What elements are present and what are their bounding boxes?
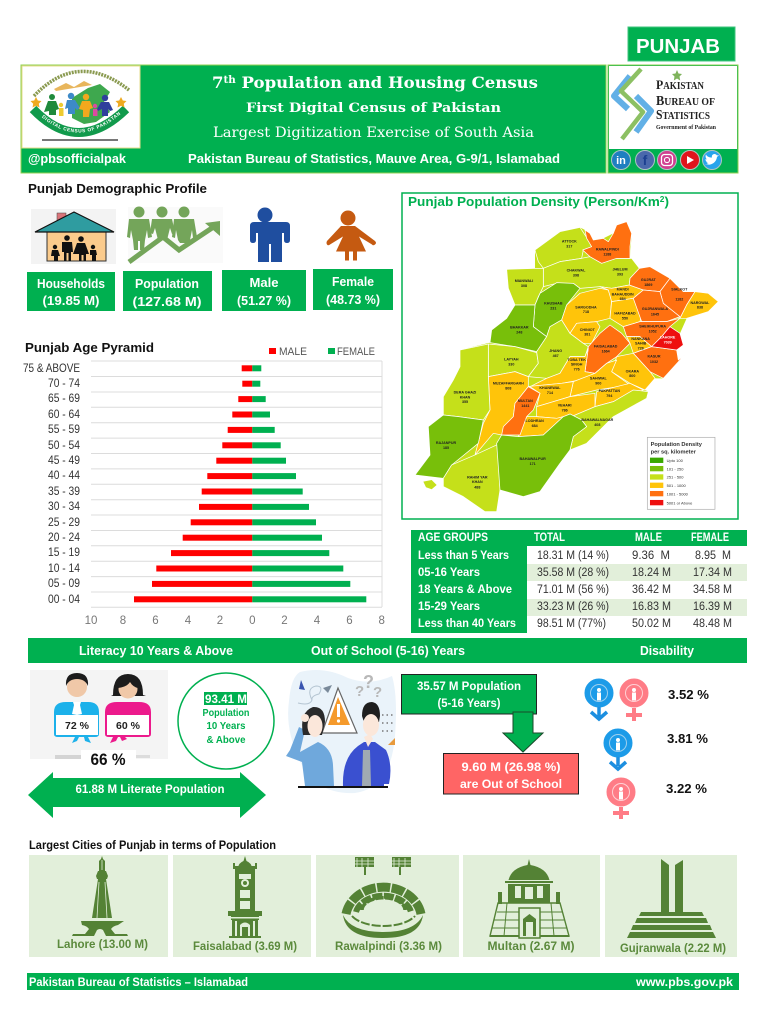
- legend: density: 101 - 250: [667, 466, 684, 471]
- table values: 50.02 M: [632, 618, 671, 630]
- map: Punjab districts: SINGH: [571, 363, 583, 367]
- legend: density: 501 - 1000: [667, 483, 686, 488]
- map: Punjab districts: 308: [521, 284, 527, 288]
- badge: PUNJAB: [628, 27, 735, 61]
- woman: 60 %: [116, 720, 141, 732]
- map: Punjab districts: 248: [516, 330, 522, 334]
- table header: [418, 532, 729, 544]
- legend: density: per sq. kilometer: [651, 449, 697, 455]
- map: Punjab districts: [415, 222, 718, 512]
- map: Punjab districts: TOBA TEK: [567, 358, 586, 362]
- city: Gujranwala: Gujranwala (2.22 M): [620, 943, 726, 955]
- heading: census title: 7: [212, 73, 223, 92]
- age labels: 00 - 04: [48, 594, 81, 606]
- icon: confused people with warning: [286, 670, 396, 793]
- city: Rawalpindi: [316, 855, 459, 957]
- heading: density title: Punjab Population Density (Person/Km: [408, 194, 649, 209]
- heading: first digital census: First Digital Census of Pakistan: [246, 101, 502, 116]
- map: Punjab districts: MANDI: [617, 288, 629, 292]
- icon: disability female: [608, 780, 634, 819]
- map: Punjab districts: FAISALABAD: [594, 345, 618, 349]
- table values: 35.58 M (28 %): [537, 567, 609, 579]
- map: Punjab districts: 794: [606, 394, 613, 398]
- city: Rawalpindi: Rawalpindi (3.36 M): [335, 941, 442, 953]
- icon: households: [31, 209, 116, 264]
- logo: digital census of Pakistan: DIGITAL CENSUS OF PAKISTAN: [42, 112, 120, 132]
- map: Punjab districts: OKARA: [626, 369, 639, 373]
- row labels: [418, 550, 516, 630]
- age labels: [23, 363, 81, 606]
- map: Punjab districts: SHEIKHUPURA: [639, 325, 666, 329]
- map: Punjab districts: BHAKKAR: [510, 325, 529, 329]
- row labels: Less than 5 Years: [418, 550, 509, 562]
- icons: social media: f: [643, 152, 648, 168]
- label: population: (127.68 M): [132, 294, 202, 309]
- map: Punjab districts: 467: [553, 354, 559, 358]
- callout: population 10 years and above: 93.41 M: [205, 694, 247, 706]
- map: Punjab districts: 355: [462, 400, 468, 404]
- table header: AGE GROUPS: [418, 532, 488, 544]
- age labels: 50 - 54: [48, 440, 81, 452]
- age labels: 75 & ABOVE: [23, 363, 80, 375]
- axis labels: 2: [281, 615, 288, 627]
- icon: confused people with warning: ?: [355, 683, 364, 700]
- icon: disability both sexes: [586, 680, 646, 721]
- logo: digital census of Pakistan: [22, 66, 140, 148]
- axis labels: [85, 615, 385, 627]
- legend: pyramid: [269, 346, 375, 358]
- table values: 34.58 M: [693, 584, 732, 596]
- legend: density: 5001 or Above: [667, 500, 693, 505]
- legend: density: [647, 437, 715, 509]
- map: Punjab districts: VEHARI: [558, 403, 572, 407]
- legend: density: Population Density: [651, 442, 703, 448]
- map: Punjab districts: RAWALPINDI: [596, 248, 619, 252]
- box: 5-16 population: 35.57 M Population: [417, 681, 521, 693]
- icon: population growth: [127, 206, 223, 263]
- map: Punjab districts: MIANWALI: [515, 279, 533, 283]
- city: Multan: Multan (2.67 M): [488, 941, 575, 953]
- map: Punjab districts: MUZAFFARGARH: [493, 382, 524, 386]
- table values: 33.23 M (26 %): [537, 601, 609, 613]
- map: Punjab districts: JHELUM: [612, 267, 628, 271]
- label: male: [222, 270, 306, 311]
- axis labels: 4: [185, 615, 192, 627]
- heading: census title: th: [224, 75, 237, 86]
- map: Punjab districts: 786: [562, 408, 568, 412]
- map: Punjab districts: 800: [629, 374, 635, 378]
- age labels: 45 - 49: [48, 455, 80, 467]
- table values: 18.24 M: [632, 567, 671, 579]
- table: age groups: [411, 530, 747, 633]
- age labels: 55 - 59: [48, 424, 80, 436]
- map: Punjab districts: 488: [474, 485, 480, 489]
- map: Punjab districts: 317: [566, 244, 572, 248]
- panel: population density: [402, 193, 738, 519]
- map: Punjab districts: 900: [595, 381, 601, 385]
- callout: population 10 years and above: Population: [202, 708, 250, 719]
- map: Punjab districts: KHUSHAB: [544, 302, 563, 306]
- map: Punjab districts: 684: [532, 424, 539, 428]
- age labels: 65 - 69: [48, 393, 80, 405]
- map: Punjab districts: KHAN: [460, 395, 471, 399]
- table values: 71.01 M (56 %): [537, 584, 609, 596]
- box: out of school: [444, 754, 578, 794]
- map: Punjab districts: 1645: [651, 312, 659, 316]
- city: Lahore: [29, 855, 168, 957]
- city: Faisalabad: Faisalabad (3.69 M): [193, 941, 297, 953]
- arrow: literate population: [28, 772, 266, 818]
- table values: 8.95 M: [695, 550, 731, 562]
- icon: confused people with warning: ?: [363, 672, 374, 692]
- header banner: [20, 64, 606, 174]
- city: Lahore: Lahore (13.00 M): [57, 939, 148, 951]
- callout: population 10 years and above: 10 Years: [206, 721, 246, 732]
- table values: [537, 550, 732, 630]
- heading: census title: Population and Housing Census: [236, 73, 538, 92]
- icon: male: [244, 208, 290, 262]
- map: Punjab districts: 231: [550, 307, 556, 311]
- label: population: [123, 271, 212, 311]
- row labels: 18 Years & Above: [418, 584, 512, 596]
- box: out of school: 9.60 M (26.98 %): [462, 760, 561, 774]
- icons: social media: in: [616, 155, 626, 167]
- map: Punjab districts: 1869: [644, 283, 652, 287]
- overall literacy: [81, 750, 136, 770]
- right person: [343, 702, 390, 786]
- footer bar: Pakistan Bureau of Statistics – Islamabad: [29, 977, 248, 989]
- axis labels: 6: [152, 615, 159, 627]
- icon: female: [326, 210, 376, 260]
- icon: PBS chevrons: [614, 69, 651, 139]
- icon: literacy man and woman: [30, 670, 168, 770]
- legend: density: 1001 - 5000: [667, 491, 689, 496]
- city: Faisalabad: [173, 855, 311, 957]
- map: Punjab districts: 808: [505, 387, 511, 391]
- label: households: Households: [37, 276, 105, 291]
- table values: 98.51 M (77%): [537, 618, 606, 630]
- map: Punjab districts: PAKPATTAN: [599, 389, 620, 393]
- arrow: down: [503, 712, 543, 752]
- map: Punjab districts: GUJRAT: [641, 278, 656, 282]
- map: Punjab districts: SIALKOT: [671, 288, 688, 292]
- icon: literacy man and woman: 66 %: [90, 750, 126, 769]
- age labels: 20 - 24: [48, 532, 81, 544]
- age labels: 25 - 29: [48, 517, 80, 529]
- map: Punjab districts: 550: [622, 316, 628, 320]
- map: Punjab districts: 776: [574, 367, 580, 371]
- icon: confused people with warning: ?: [373, 684, 382, 701]
- axis labels: 6: [346, 615, 353, 627]
- axis labels: 8: [378, 615, 385, 627]
- legend: pyramid: FEMALE: [337, 346, 375, 358]
- map: Punjab districts: LODHRAN: [526, 419, 544, 423]
- map: Punjab districts: BAHAUDDIN: [612, 292, 634, 296]
- map: Punjab districts: ATTOCK: [562, 240, 577, 244]
- icons: social media: [612, 150, 722, 170]
- map: Punjab districts: 728: [638, 346, 644, 350]
- map: Punjab districts: KASUR: [647, 355, 661, 359]
- label: households: (19.85 M): [42, 293, 100, 308]
- city: Multan: [463, 855, 600, 957]
- map: Punjab districts: KHAN: [472, 480, 483, 484]
- table header: FEMALE: [691, 532, 729, 544]
- map: Punjab districts: GUJRANWALA: [642, 307, 668, 311]
- map: Punjab districts: SAHIWAL: [590, 376, 608, 380]
- map: Punjab districts: LAYYAH: [504, 357, 519, 361]
- map: Punjab districts: 185: [443, 446, 449, 450]
- logo panel: Pakistan Bureau of Statistics: [608, 65, 738, 173]
- legend: pyramid: MALE: [279, 346, 307, 358]
- heading: demographic profile: Punjab Demographic Profile: [28, 181, 207, 196]
- map: Punjab districts: DERA GHAZI: [454, 391, 476, 395]
- female bars: [252, 365, 366, 602]
- heading: density title: 2: [660, 195, 665, 204]
- map: Punjab districts: JHANG: [549, 349, 562, 353]
- city: Gujranwala: [605, 855, 737, 957]
- age labels: 70 - 74: [48, 378, 81, 390]
- table values: 18.31 M (14 %): [537, 550, 609, 562]
- age labels: 30 - 34: [48, 501, 81, 513]
- map: Punjab districts: 7039: [664, 340, 672, 344]
- map: Punjab districts: LAHORE: [660, 335, 676, 339]
- male bars: [134, 365, 252, 602]
- label: male: (51.27 %): [237, 293, 291, 308]
- heading: largest digitization: Largest Digitization Exercise of South Asia: [213, 125, 534, 141]
- heading: density title: ): [664, 194, 669, 209]
- section bar: literacy, out of school, disability: Disability: [640, 644, 694, 658]
- label: female: Female: [332, 274, 374, 289]
- box: 5-16 population: [402, 674, 536, 714]
- table values: 36.42 M: [632, 584, 671, 596]
- table values: 16.83 M: [632, 601, 671, 613]
- map: Punjab districts: SARGODHA: [575, 305, 597, 309]
- table values: 16.39 M: [693, 601, 732, 613]
- age labels: 05 - 09: [48, 578, 80, 590]
- icon: disability male: [606, 730, 630, 769]
- logo panel: Pakistan Bureau of Statistics: Government of Pakistan: [656, 124, 716, 131]
- address: Pakistan Bureau of Statistics, Mauve Area, G-9/1, Islamabad: [188, 152, 560, 166]
- age labels: 10 - 14: [48, 563, 81, 575]
- age labels: 35 - 39: [48, 486, 80, 498]
- map: Punjab districts: 714: [547, 391, 554, 395]
- label: population: Population: [135, 276, 199, 291]
- axis labels: 10: [85, 615, 97, 627]
- table values: 17.34 M: [693, 567, 732, 579]
- map: Punjab districts: 1032: [650, 360, 658, 364]
- map: Punjab districts: 330: [508, 362, 514, 366]
- box: 5-16 population: (5-16 Years): [438, 698, 501, 710]
- bar chart: age pyramid: [23, 361, 385, 627]
- map: Punjab districts: NANKANA: [631, 337, 650, 341]
- logo panel: Pakistan Bureau of Statistics: BUREAU OF: [656, 94, 715, 109]
- map: Punjab districts: MULTAN: [518, 399, 533, 403]
- left person: [286, 707, 334, 786]
- axis labels: 4: [314, 615, 321, 627]
- map: Punjab districts: 1052: [649, 329, 657, 333]
- age labels: 15 - 19: [48, 547, 80, 559]
- map: Punjab districts: 1441: [521, 404, 529, 408]
- section bar: literacy, out of school, disability: [28, 638, 747, 663]
- social handle: @pbsofficialpak: [28, 151, 127, 166]
- logo panel: Pakistan Bureau of Statistics: PAKISTAN: [656, 77, 705, 92]
- map: Punjab districts: NAROWAL: [691, 301, 710, 305]
- footer bar: www.pbs.gov.pk: [635, 977, 734, 989]
- arrow: literate population: 61.88 M Literate Population: [76, 784, 224, 796]
- stat: male disability: 3.81 %: [667, 731, 708, 746]
- logo panel: Pakistan Bureau of Statistics: STATISTICS: [656, 108, 710, 123]
- callout: population 10 years and above: [178, 673, 274, 769]
- row labels: 05-16 Years: [418, 567, 480, 579]
- map: Punjab districts: CHINIOT: [580, 328, 596, 332]
- stat: female disability: 3.22 %: [666, 781, 707, 796]
- map: Punjab districts: RAJANPUR: [436, 441, 457, 445]
- table header: MALE: [635, 532, 662, 544]
- man: 72 %: [65, 720, 90, 732]
- map: Punjab districts: BAHAWALNAGAR: [581, 418, 614, 422]
- callout: population 10 years and above: & Above: [206, 735, 246, 746]
- map: Punjab districts: HAFIZABAD: [614, 311, 636, 315]
- heading: age pyramid: Punjab Age Pyramid: [25, 340, 154, 355]
- legend: density: Upto 100: [667, 458, 684, 463]
- label: female: [313, 269, 393, 310]
- heading: largest cities: Largest Cities of Punjab in terms of Population: [29, 840, 276, 852]
- axis labels: 2: [217, 615, 223, 627]
- box: out of school: are Out of School: [460, 777, 562, 791]
- badge: PUNJAB: PUNJAB: [636, 36, 720, 58]
- map: Punjab districts: 1182: [675, 297, 683, 301]
- table values: 9.36 M: [632, 550, 670, 562]
- map: Punjab districts: 408: [594, 423, 600, 427]
- label: households: [27, 272, 115, 311]
- axis labels: 0: [249, 615, 256, 627]
- legend: density: 251 - 500: [667, 475, 684, 480]
- table header: TOTAL: [534, 532, 565, 544]
- label: male: Male: [250, 275, 278, 290]
- map: Punjab districts: BAHAWALPUR: [520, 457, 546, 461]
- section bar: literacy, out of school, disability: Out of School (5-16) Years: [311, 644, 465, 658]
- map: Punjab districts: 1664: [602, 350, 611, 354]
- row labels: 15-29 Years: [418, 601, 480, 613]
- map: Punjab districts: RAHIM YAR: [467, 475, 488, 479]
- map: Punjab districts: 381: [584, 333, 590, 337]
- map: Punjab districts: 718: [583, 310, 589, 314]
- section bar: literacy, out of school, disability: Literacy 10 Years & Above: [79, 644, 233, 658]
- footer bar: [27, 973, 739, 990]
- map: Punjab districts: 171: [530, 462, 536, 466]
- map: Punjab districts: 838: [697, 305, 703, 309]
- axis labels: 8: [120, 615, 126, 627]
- label: female: (48.73 %): [326, 292, 380, 307]
- map: Punjab districts: 1188: [603, 253, 611, 257]
- age labels: 60 - 64: [48, 409, 81, 421]
- stat: both sexes: 3.52 %: [668, 687, 709, 702]
- map: Punjab districts: KHANEWAL: [539, 386, 561, 390]
- map: Punjab districts: CHAKWAL: [567, 269, 586, 273]
- map: Punjab districts: 398: [573, 274, 579, 278]
- row labels: Less than 40 Years: [418, 618, 516, 630]
- map: Punjab districts: 684: [620, 297, 627, 301]
- map: Punjab districts: SAHIB: [635, 342, 647, 346]
- table values: 48.48 M: [693, 618, 732, 630]
- map: Punjab districts: 393: [617, 272, 623, 276]
- age labels: 40 - 44: [48, 470, 81, 482]
